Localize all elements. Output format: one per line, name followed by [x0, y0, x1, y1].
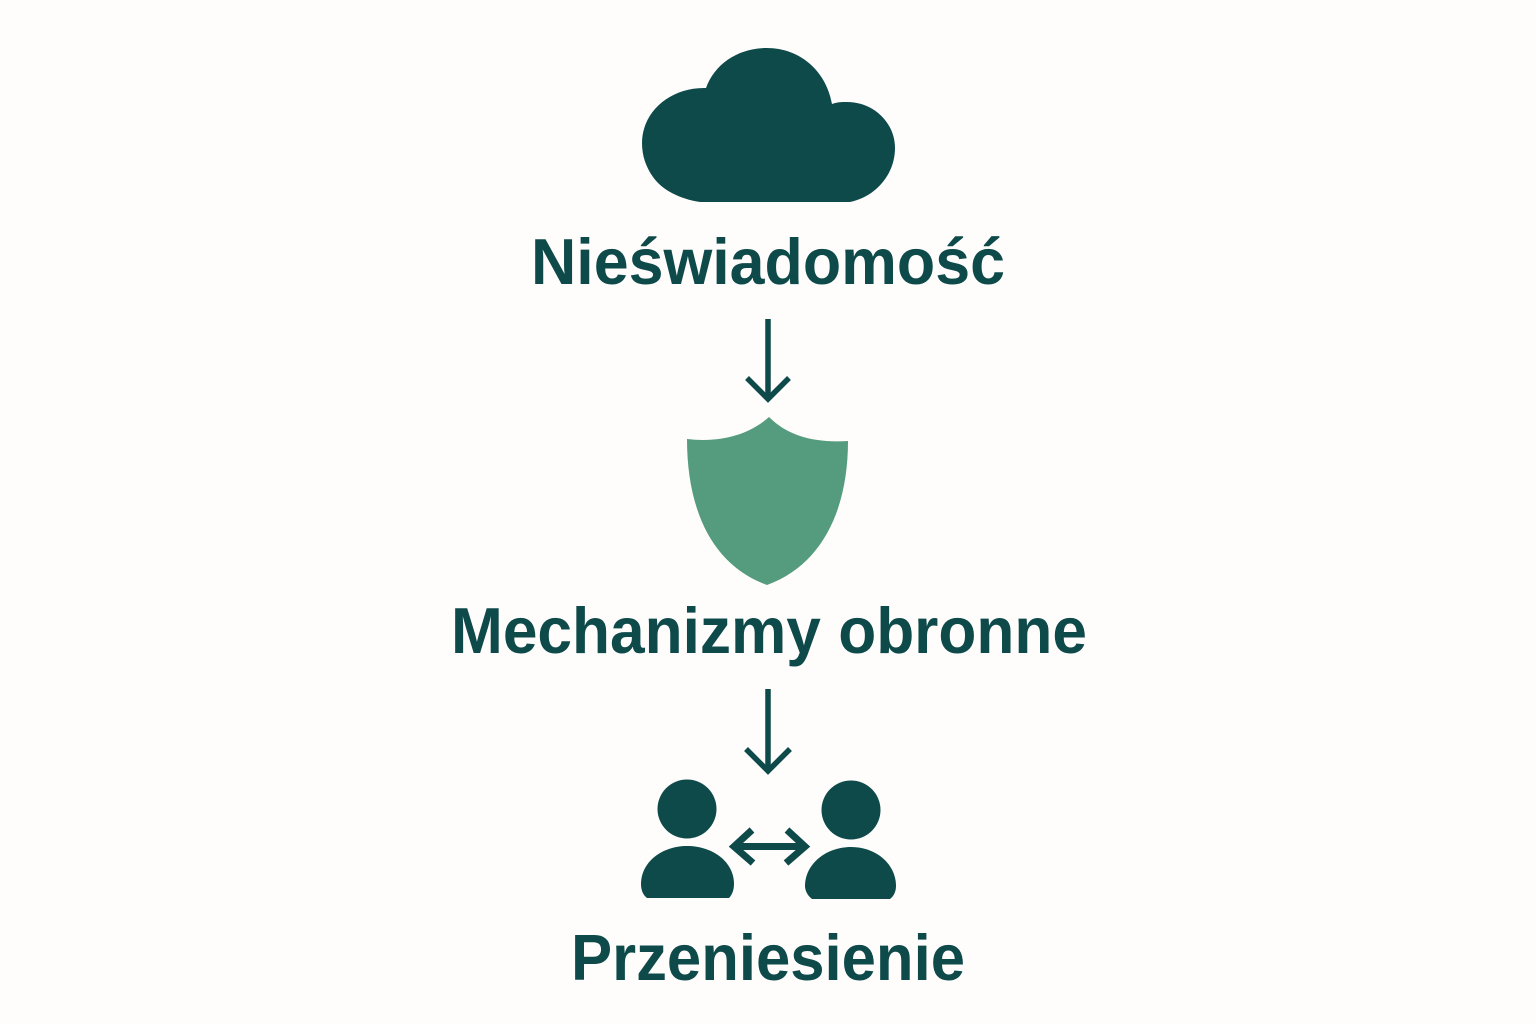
arrow: down to people	[746, 689, 790, 771]
heading: Mechanizmy obronne: Mechanizmy obronne	[451, 594, 1087, 667]
icon: two people with exchange arrow	[641, 780, 896, 899]
heading: Nieświadomość: Nieświadomość	[531, 225, 1005, 298]
arrow: two-way	[734, 830, 805, 863]
icon: right person	[805, 780, 896, 899]
arrow: down to shield	[747, 319, 789, 399]
icon: shield	[687, 417, 848, 585]
heading: Przeniesienie: Przeniesienie	[571, 921, 965, 994]
icon: cloud	[642, 48, 895, 202]
icon: left person	[641, 780, 734, 898]
